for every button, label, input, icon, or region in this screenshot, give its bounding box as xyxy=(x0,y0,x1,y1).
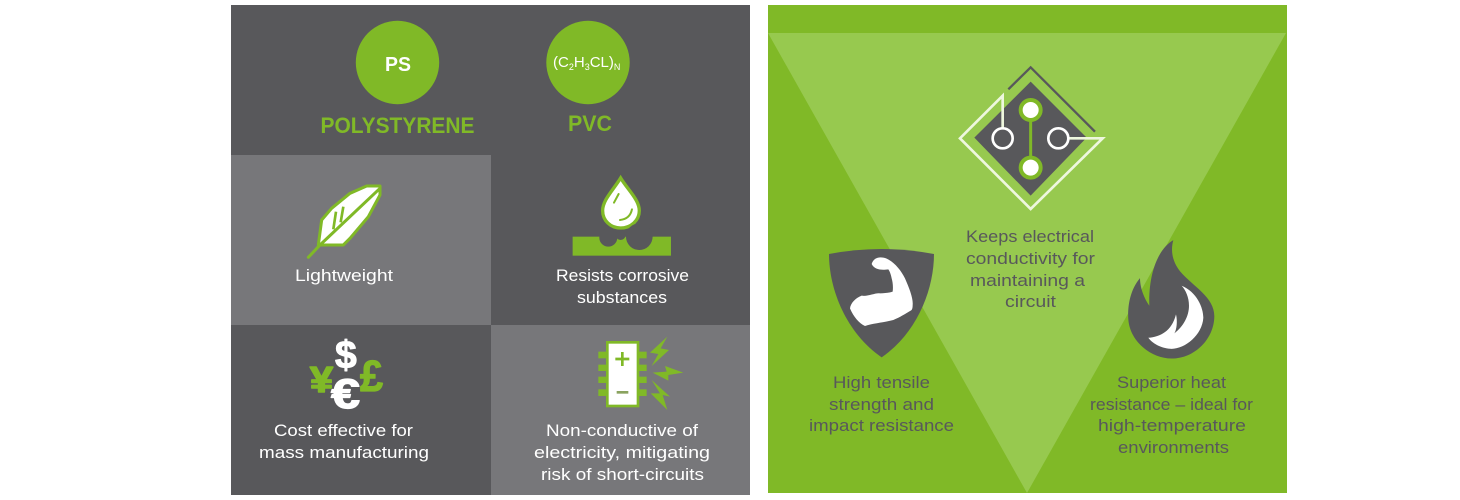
label: non-conductive: Non-conductive of xyxy=(546,421,698,440)
panel: green properties xyxy=(768,5,1287,493)
label: tensile strength: strength and xyxy=(829,395,934,414)
badge: PS: PS xyxy=(385,54,411,76)
badge: PVC formula xyxy=(546,21,630,104)
label: tensile strength: High tensile xyxy=(833,373,930,392)
label: tensile strength: impact resistance xyxy=(809,416,954,435)
badge: PVC formula: (C xyxy=(553,54,569,71)
label: non-conductive: electricity, mitigating xyxy=(534,443,710,462)
label: heat resistance: environments xyxy=(1118,438,1229,457)
heading: polystyrene: POLYSTYRENE xyxy=(320,113,474,138)
heading: PVC: PVC xyxy=(568,111,612,136)
badge: PVC formula: H xyxy=(574,54,585,71)
cell: resists corrosive substances xyxy=(556,178,689,307)
icon: currency symbols: £ xyxy=(360,352,383,401)
label: cost effective: mass manufacturing xyxy=(259,443,429,462)
label: non-conductive: risk of short-circuits xyxy=(541,465,704,484)
label: cost effective: Cost effective for xyxy=(274,421,413,440)
label: heat resistance xyxy=(1090,373,1253,457)
block: heat resistance xyxy=(1090,240,1253,457)
label: electrical conductivity: maintaining a xyxy=(970,271,1086,290)
block: electrical conductivity xyxy=(960,67,1103,311)
icon: circuit board xyxy=(960,67,1103,209)
icon: flame xyxy=(1128,240,1214,359)
label: non-conductive xyxy=(534,421,710,484)
label: heat resistance: Superior heat xyxy=(1117,373,1226,392)
icon: chip with sparks xyxy=(598,337,683,410)
badge: PVC formula: 2 xyxy=(569,62,574,72)
label: electrical conductivity xyxy=(966,227,1095,311)
badge: PS xyxy=(356,21,439,104)
label: heat resistance: high-temperature xyxy=(1098,416,1246,435)
cell: lightweight xyxy=(295,186,393,285)
icon: currency symbols xyxy=(310,334,383,417)
icon: currency symbols: ¥ xyxy=(310,359,333,400)
badge: PVC formula: CL) xyxy=(590,54,614,71)
label: lightweight: Lightweight xyxy=(295,266,393,285)
cell: cost effective xyxy=(259,334,429,462)
block: tensile strength xyxy=(809,249,954,435)
label: heat resistance: resistance – ideal for xyxy=(1090,395,1253,414)
icon: currency symbols: € xyxy=(331,370,360,417)
icon: feather xyxy=(308,186,380,257)
icon: corroding drop xyxy=(573,178,671,256)
label: electrical conductivity: conductivity for xyxy=(966,249,1095,268)
label: resists corrosive substances: substances xyxy=(577,288,667,307)
icon: shield with arm xyxy=(829,249,934,357)
label: resists corrosive substances xyxy=(556,266,689,307)
badge: PVC formula: N xyxy=(614,62,620,72)
background triangle xyxy=(768,33,1286,493)
label: tensile strength xyxy=(809,373,954,435)
badge: PVC formula: 3 xyxy=(585,62,590,72)
label: electrical conductivity: Keeps electrical xyxy=(966,227,1094,246)
label: electrical conductivity: circuit xyxy=(1005,292,1056,311)
panel: polystyrene and PVC properties xyxy=(231,5,750,495)
icon: currency symbols: $ xyxy=(335,334,357,377)
cell: non-conductive xyxy=(534,337,710,484)
label: resists corrosive substances: Resists corrosive xyxy=(556,266,689,285)
label: cost effective xyxy=(259,421,429,462)
